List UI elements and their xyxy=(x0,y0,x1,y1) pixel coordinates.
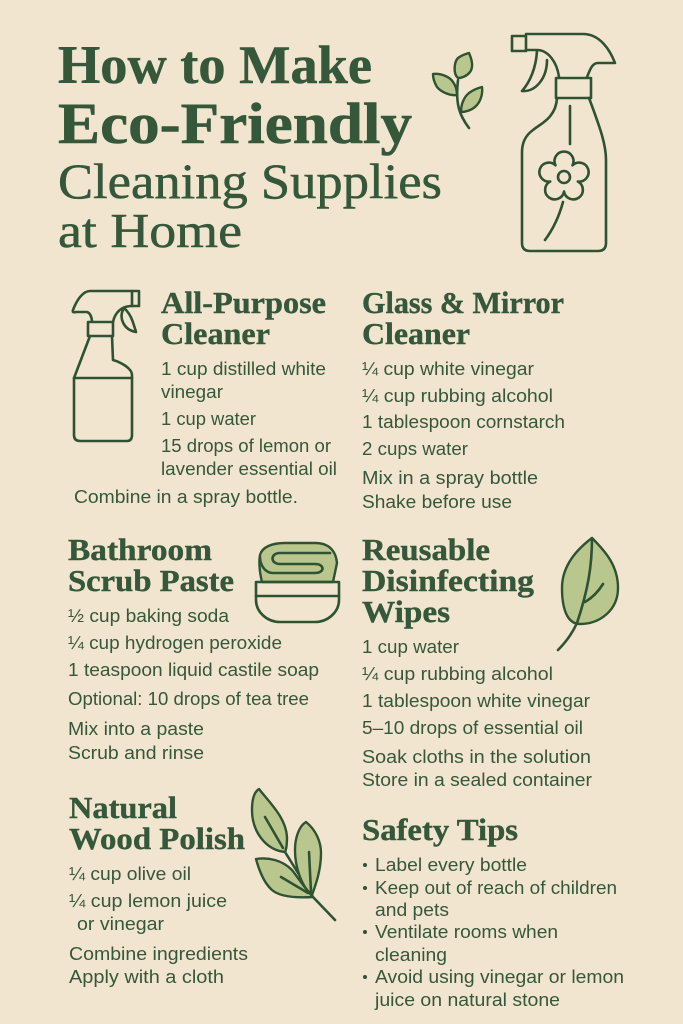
icon: green sprig xyxy=(433,53,482,128)
ingredients and directions: Mix in a spray bottle xyxy=(362,467,538,488)
ingredients and directions: 15 drops of lemon or xyxy=(161,435,331,456)
icon: spray bottle xyxy=(73,291,139,441)
bullet list: Keep out of reach of children xyxy=(375,877,617,898)
heading xyxy=(68,532,234,598)
ingredients and directions: Mix into a paste xyxy=(68,718,204,739)
ingredients and directions: ¼ cup white vinegar xyxy=(362,358,534,379)
ingredients and directions: Apply with a cloth xyxy=(69,966,224,987)
ingredients and directions: Optional: 10 drops of tea tree xyxy=(68,688,309,709)
ingredients and directions: 5–10 drops of essential oil xyxy=(362,717,583,738)
bullet list: juice on natural stone xyxy=(374,989,560,1010)
heading xyxy=(362,532,535,629)
panel: natural wood polish xyxy=(69,789,335,987)
bullet list: Avoid using vinegar or lemon xyxy=(375,966,624,987)
heading: Cleaner xyxy=(161,316,270,351)
heading: Safety Tips xyxy=(362,812,518,847)
ingredients and directions: 2 cups water xyxy=(362,438,468,459)
ingredients and directions: Scrub and rinse xyxy=(68,742,204,763)
bullet list: Label every bottle xyxy=(375,854,527,875)
ingredients and directions: ¼ cup rubbing alcohol xyxy=(362,663,553,684)
heading: Wipes xyxy=(362,594,450,629)
title xyxy=(58,35,442,258)
ingredients and directions xyxy=(74,358,337,507)
heading xyxy=(362,285,564,351)
title: Eco-Friendly xyxy=(58,91,412,156)
icon: leaf xyxy=(558,538,618,650)
ingredients and directions: ¼ cup olive oil xyxy=(69,863,191,884)
heading xyxy=(69,790,245,856)
ingredients and directions: Combine in a spray bottle. xyxy=(74,486,298,507)
heading: Disinfecting xyxy=(362,563,535,598)
panel: safety tips xyxy=(362,812,624,1010)
title: at Home xyxy=(58,203,242,258)
bullet list: cleaning xyxy=(375,944,447,965)
ingredients and directions: Store in a sealed container xyxy=(362,769,592,790)
heading: All-Purpose xyxy=(161,285,326,320)
ingredients and directions: 1 cup water xyxy=(362,636,459,657)
title: Cleaning Supplies xyxy=(58,153,442,209)
ingredients and directions xyxy=(68,605,319,763)
heading: Cleaner xyxy=(362,316,470,351)
ingredients and directions xyxy=(362,636,592,790)
ingredients and directions: ¼ cup lemon juice xyxy=(69,890,227,911)
bullet list: Ventilate rooms when xyxy=(375,921,558,942)
ingredients and directions: Combine ingredients xyxy=(69,943,248,964)
panel: reusable disinfecting wipes xyxy=(362,532,618,790)
ingredients and directions: ½ cup baking soda xyxy=(68,605,230,626)
heading: Bathroom xyxy=(68,532,212,567)
ingredients and directions: 1 cup distilled white xyxy=(161,358,326,379)
icon: leafy branch xyxy=(252,789,335,920)
ingredients and directions: lavender essential oil xyxy=(161,458,337,479)
ingredients and directions: or vinegar xyxy=(77,913,164,934)
heading: Wood Polish xyxy=(69,821,245,856)
ingredients and directions: 1 cup water xyxy=(161,408,256,429)
ingredients and directions xyxy=(69,863,248,987)
heading xyxy=(161,285,326,351)
ingredients and directions: ¼ cup rubbing alcohol xyxy=(362,385,553,406)
panel: all-purpose cleaner xyxy=(73,285,337,507)
icon: towel in bowl xyxy=(256,543,339,622)
panel: glass and mirror cleaner xyxy=(362,285,565,512)
heading: Natural xyxy=(69,790,177,825)
icon: large spray bottle with flower xyxy=(512,34,615,251)
bullet list: and pets xyxy=(375,899,449,920)
heading: Scrub Paste xyxy=(68,563,234,598)
ingredients and directions xyxy=(362,358,565,512)
ingredients and directions: Soak cloths in the solution xyxy=(362,746,591,767)
ingredients and directions: ¼ cup hydrogen peroxide xyxy=(68,632,282,653)
ingredients and directions: Shake before use xyxy=(362,491,512,512)
ingredients and directions: vinegar xyxy=(161,381,223,402)
heading: Glass & Mirror xyxy=(362,285,564,320)
bullet list xyxy=(363,854,624,1010)
panel: bathroom scrub paste xyxy=(68,532,339,763)
title: How to Make xyxy=(58,35,372,95)
ingredients and directions: 1 tablespoon white vinegar xyxy=(362,690,590,711)
heading: Reusable xyxy=(362,532,490,567)
ingredients and directions: 1 teaspoon liquid castile soap xyxy=(68,659,319,680)
ingredients and directions: 1 tablespoon cornstarch xyxy=(362,411,565,432)
